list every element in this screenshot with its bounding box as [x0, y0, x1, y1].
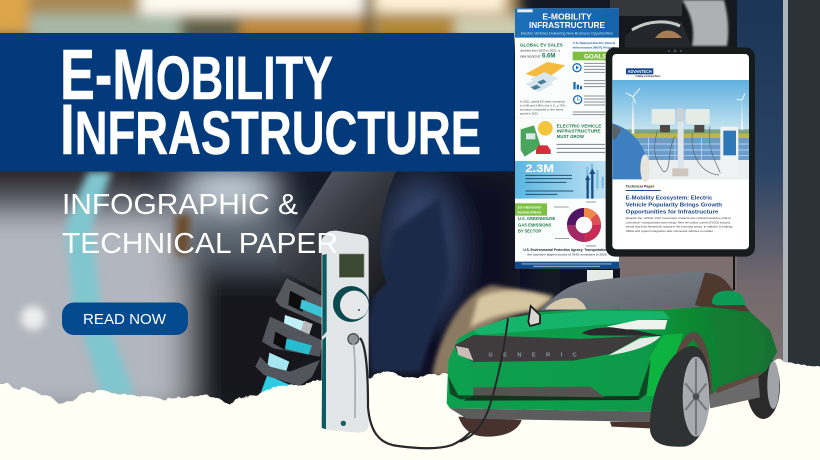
paper summary: trends and how Advantech supports the booming sector, in addition to helping: [626, 225, 733, 229]
car connector: [528, 306, 540, 326]
goals section: U.S. National Electric Vehicle: [573, 41, 616, 45]
car daytime light: [607, 320, 667, 329]
subtitle line 2: TECHNICAL PAPER: [62, 228, 338, 260]
car hood vent: [582, 328, 663, 336]
grip band 1: [275, 278, 332, 326]
title line 2: INFRASTRUCTURE: [60, 91, 481, 170]
plug grip and cyan connector: [255, 278, 332, 386]
tablet screen: [612, 54, 749, 249]
car body: [447, 307, 777, 412]
paper title: Vehicle Popularity Brings Growth: [626, 203, 723, 209]
goals section: GOALS: [584, 53, 607, 60]
tablet with technical paper: [606, 47, 755, 257]
greenhouse gas donut section: [515, 202, 601, 246]
car front wheel: [650, 332, 713, 447]
greenhouse gas donut section: U.S. GREENHOUSE: [518, 216, 555, 221]
greenhouse gas donut section: Societal Effects: [517, 210, 541, 214]
car rear wheel: [747, 354, 780, 419]
paper cover image: [612, 80, 749, 182]
goals section: Infrastructure (NEVI) Program: [573, 45, 616, 49]
charging station: [255, 231, 369, 433]
car lower trim: [448, 359, 762, 422]
blue title band: [0, 33, 514, 172]
grip band 3: [255, 357, 320, 386]
global ev sales section: to 6.6M and 2.8M in the U.S., a 73%: [520, 103, 566, 107]
epa source note: U.S. Environmental Protection Agency: Transportation is: [523, 248, 611, 252]
infographic header: E-MOBILITY: [542, 12, 592, 22]
electric vehicle infrastructure section: ELECTRIC VEHICLE: [557, 123, 602, 129]
advantech logo: ADVANTECH: [628, 69, 652, 74]
station cable port: [348, 334, 359, 344]
station body: [322, 231, 369, 433]
electric vehicle infrastructure section: INFRASTRUCTURE: [557, 129, 601, 135]
goals section: [573, 41, 616, 115]
car roof: [540, 271, 751, 313]
charging nozzle handle: [277, 170, 397, 297]
station display: [339, 254, 364, 277]
green electric car: [447, 271, 780, 447]
paper title: E-Mobility Ecosystem: Electric: [626, 195, 712, 201]
infographic header: INFRASTRUCTURE: [529, 20, 605, 30]
tablet frame: [606, 47, 755, 257]
infographic footer: [515, 262, 619, 268]
navy rear fender: [368, 197, 450, 372]
main title: [60, 36, 481, 170]
subtitle: [62, 189, 338, 260]
grip band 2: [262, 317, 323, 357]
2.3M section: [515, 161, 619, 199]
infographic header: Electric Vehicles Delivering New Business Opportunities: [521, 31, 613, 35]
greenhouse gas donut section: Zero-Emission: [517, 205, 541, 209]
advantech logo: [626, 68, 660, 78]
greenhouse gas donut section: BY SECTOR: [518, 229, 542, 234]
paper summary: commerce—transportation and energy. Here we outline current EV/ICE industry: [626, 220, 731, 224]
subtitle line 1: INFOGRAPHIC &: [62, 189, 298, 221]
electric vehicle infrastructure section: [515, 118, 619, 157]
car headlight: [608, 336, 661, 355]
paper summary: Despite the vehicle CO2 movement impacts two critical industries vital to: [626, 216, 731, 220]
global ev sales section: doubled from 2020 to 2021, a: [520, 48, 560, 52]
right wall: [615, 0, 740, 250]
epa source note: [523, 248, 611, 256]
global ev sales section: [520, 42, 566, 115]
cable on car: [460, 318, 508, 442]
global ev sales section: In 2021, global EV sales increased: [520, 99, 566, 103]
read now button: [62, 302, 188, 335]
global ev sales section: GLOBAL EV SALES: [520, 42, 563, 48]
electric vehicle infrastructure section: MUST GROW: [557, 134, 584, 140]
epa source note: the country's largest source of GHG emissions in 2020: [527, 252, 607, 256]
infographic header: [515, 8, 619, 38]
read now button: READ NOW: [83, 311, 167, 328]
torn paper bottom: [0, 360, 820, 460]
technical paper label: [626, 185, 661, 191]
infographic sheet preview: [515, 8, 619, 268]
advantech logo: Enabling an Intelligent Planet: [636, 75, 660, 78]
blurred top strip: [0, 0, 525, 44]
paper summary: [626, 216, 733, 233]
charging cable from station to car: [360, 318, 509, 448]
global ev sales section: increase compared to the same: [520, 107, 564, 111]
title line 1: E-MOBILITY: [60, 36, 333, 115]
blurred cyan floor stripe: [66, 172, 135, 395]
paper summary: OEMs and system integrators take connected vehicles to market.: [626, 229, 714, 233]
global ev sales section: new record of: [520, 54, 540, 58]
station dial: [333, 286, 369, 322]
global ev sales section: period in 2021: [520, 111, 539, 115]
car grille: [455, 335, 643, 362]
car shadow underside: [458, 417, 650, 437]
global ev sales section: 6.6M: [542, 53, 555, 59]
car badge text: GENERIC: [488, 353, 577, 359]
technical paper label: Technical Paper: [626, 185, 655, 189]
paper title: Opportunities for Infrastructure: [626, 210, 718, 216]
paper title: [626, 195, 723, 216]
greenhouse gas donut section: GAS EMISSIONS: [518, 223, 551, 228]
2.3M section: 2.3M: [525, 163, 554, 175]
plug cyan tail: [259, 375, 290, 400]
car mirror: [712, 291, 745, 305]
